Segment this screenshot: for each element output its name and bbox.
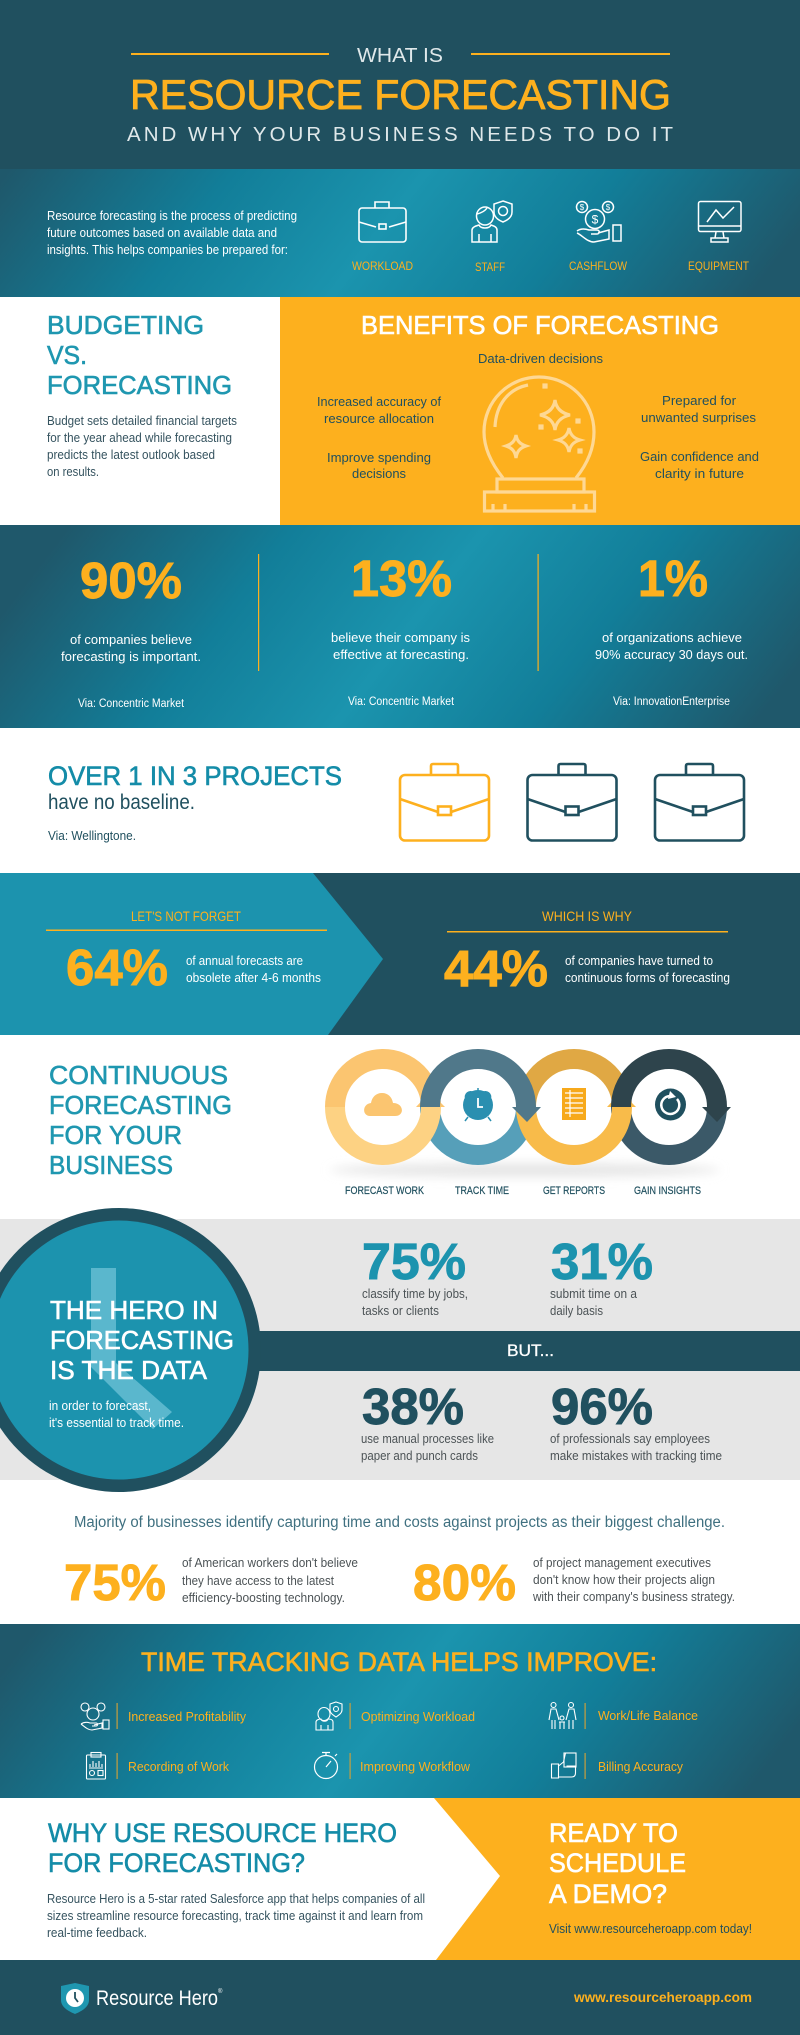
stat: 13%: believe their company is	[331, 630, 470, 645]
stat: 31% submit: daily basis	[550, 1303, 603, 1318]
item: optimizing workload: Optimizing Workload	[361, 1709, 475, 1724]
heading: continuous forecasting: FOR YOUR	[49, 1122, 182, 1150]
stat: 75% classify: tasks or clients	[362, 1303, 439, 1318]
stat: 96% mistakes: make mistakes with tracking time	[550, 1448, 722, 1463]
panel: benefits of forecasting	[280, 297, 800, 525]
website: www.resourceheroapp.com	[573, 1989, 752, 2005]
stat: 90%	[61, 552, 201, 710]
icon: cashflow	[576, 202, 621, 242]
text: 64% description: obsolete after 4-6 months	[186, 970, 321, 985]
panel: intro band	[0, 169, 800, 297]
label: equipment: EQUIPMENT	[688, 259, 750, 273]
heading: the hero in forecasting: THE HERO IN	[50, 1297, 218, 1325]
icon: workload briefcase	[359, 202, 406, 242]
benefit: confidence: Gain confidence and	[640, 449, 759, 464]
heading: budgeting vs forecasting	[47, 312, 232, 400]
label: which is why: WHICH IS WHY	[542, 908, 633, 924]
icon: cashflow: $	[580, 203, 585, 212]
intro text: Resource forecasting is the process of predicting	[47, 208, 297, 223]
stat: 75% classify: classify time by jobs,	[362, 1286, 468, 1301]
brand name: Resource Hero	[96, 1987, 218, 2010]
heading: continuous forecasting: CONTINUOUS	[49, 1062, 228, 1090]
intro text: future outcomes based on available data and	[47, 225, 277, 240]
panel: time tracking data	[0, 1624, 800, 1798]
stat: 13%: 13%	[351, 550, 452, 607]
text: track time note: in order to forecast,	[49, 1398, 151, 1413]
panel: over 1 in 3 projects	[0, 728, 800, 873]
stat: 80% executives: with their company's business strategy.	[532, 1589, 735, 1604]
text: budget description: Budget sets detailed financial targets	[47, 413, 237, 428]
stat: 1%: 90% accuracy 30 days out.	[595, 647, 748, 662]
icon: staff	[472, 201, 512, 242]
stat: 38% manual: paper and punch cards	[361, 1448, 478, 1463]
source: Via: Wellingtone.	[48, 828, 136, 843]
text: track time note: it's essential to track time.	[49, 1415, 184, 1430]
label: get reports: GET REPORTS	[543, 1185, 605, 1197]
benefit: spending: Improve spending	[327, 450, 431, 465]
benefit: spending	[327, 450, 431, 481]
heading: ready to schedule a demo: SCHEDULE	[549, 1848, 686, 1878]
item: increased profitability	[81, 1703, 246, 1730]
stat: 13%: effective at forecasting.	[333, 647, 469, 662]
subtitle: AND WHY YOUR BUSINESS NEEDS TO DO IT	[127, 123, 673, 146]
heading: budgeting vs forecasting: BUDGETING	[47, 312, 204, 340]
label: but: BUT...	[507, 1341, 554, 1360]
icon: equipment	[698, 202, 741, 242]
heading: continuous forecasting: BUSINESS	[49, 1152, 173, 1180]
panel: stats band	[0, 525, 800, 728]
heading: ready to schedule a demo: READY TO	[549, 1818, 678, 1848]
stat: 75% american workers	[64, 1554, 358, 1611]
stat: 31% submit: submit time on a	[550, 1286, 638, 1301]
stat: 1%	[595, 550, 748, 708]
label: forecast work: FORECAST WORK	[345, 1185, 425, 1197]
icon: insights	[655, 1088, 686, 1120]
benefit: accuracy: resource allocation	[324, 411, 434, 426]
text: resource hero description: Resource Hero is a 5-star rated Salesforce app that helps companies of all	[47, 1891, 425, 1906]
stat: 31% submit	[550, 1233, 653, 1318]
stat: 80% executives: of project management executives	[533, 1555, 711, 1570]
item: optimizing workload	[316, 1702, 475, 1730]
but bar	[255, 1331, 800, 1371]
text: resource hero description: sizes streamline resource forecasting, track time against it and learn from	[47, 1908, 423, 1923]
text: resource hero description	[47, 1891, 425, 1940]
stat: 44%: 44%	[444, 940, 548, 997]
arrow panel: why use resource hero	[0, 1798, 500, 1960]
title: what is: WHAT IS	[357, 45, 443, 67]
heading: budgeting vs forecasting: FORECASTING	[47, 372, 232, 400]
text: track time note	[49, 1398, 184, 1430]
panel: budgeting vs forecasting	[0, 297, 280, 525]
benefit: confidence: clarity in future	[655, 466, 744, 481]
heading: majority statement: Majority of businesses identify capturing time and costs against projects as their biggest challenge.	[74, 1514, 725, 1531]
stat: 90%: Via: Concentric Market	[78, 698, 185, 710]
panel: the hero in forecasting	[0, 1208, 800, 1492]
stat: 80% executives	[413, 1554, 735, 1611]
stat: 90%: 90%	[80, 552, 182, 609]
icon: dark briefcase 1	[528, 764, 616, 840]
stat: 13%: Via: Concentric Market	[348, 696, 455, 708]
panel: continuous forecasting	[0, 1035, 800, 1219]
benefit: confidence	[640, 449, 759, 481]
registered mark: ®	[218, 1988, 223, 1995]
heading: why use resource hero	[48, 1818, 397, 1878]
stat: 96% mistakes: 96%	[551, 1378, 653, 1435]
intro text	[47, 208, 297, 257]
stat: 80% executives: 80%	[413, 1554, 516, 1611]
panel: let's not forget / which is why	[0, 873, 800, 1035]
stat: 75% american workers: they have access to the latest	[182, 1573, 334, 1588]
text: 64% description	[186, 953, 321, 985]
stat: 31% submit: 31%	[551, 1233, 653, 1290]
text: resource hero description: real-time feedback.	[47, 1925, 147, 1940]
heading: benefits: BENEFITS OF FORECASTING	[361, 312, 719, 340]
label: cashflow: CASHFLOW	[569, 259, 628, 273]
title: resource forecasting: RESOURCE FORECASTING	[130, 71, 671, 118]
benefit: spending: decisions	[352, 466, 406, 481]
arrow panel	[0, 873, 383, 1035]
heading: the hero in forecasting: FORECASTING	[50, 1327, 234, 1355]
heading: continuous forecasting: FORECASTING	[49, 1092, 232, 1120]
heading: time tracking: TIME TRACKING DATA HELPS IMPROVE:	[141, 1647, 657, 1677]
icon: dark briefcase 2	[655, 764, 744, 840]
chart: cycle rings	[330, 1059, 731, 1177]
panel: title header	[0, 0, 800, 169]
label: gain insights: GAIN INSIGHTS	[634, 1185, 701, 1197]
stat: 75% classify	[362, 1233, 468, 1318]
text: budget description: on results.	[47, 464, 99, 479]
stat: 38% manual	[361, 1378, 494, 1463]
item: billing accuracy	[552, 1753, 683, 1778]
panel: biggest challenge	[0, 1492, 800, 1624]
stat: 38% manual: use manual processes like	[361, 1431, 494, 1446]
icon: cashflow: $	[606, 203, 611, 212]
circle badge	[0, 1208, 261, 1492]
item: recording of work	[86, 1752, 229, 1779]
heading: budgeting vs forecasting: VS.	[47, 342, 87, 370]
item: billing accuracy: Billing Accuracy	[598, 1759, 683, 1774]
stat: 38% manual: 38%	[362, 1378, 464, 1435]
benefit: accuracy	[317, 394, 441, 426]
item: improving workflow: Improving Workflow	[360, 1759, 471, 1774]
stat: 75% american workers: 75%	[64, 1554, 166, 1611]
heading: ready to schedule a demo	[549, 1818, 686, 1909]
stat: 90%: forecasting is important.	[61, 649, 201, 664]
stat: 1%: of organizations achieve	[602, 630, 742, 645]
heading: continuous forecasting	[49, 1062, 232, 1180]
item: improving workflow	[314, 1752, 471, 1778]
label: track time: TRACK TIME	[455, 1185, 509, 1197]
subheading: have no baseline.	[48, 791, 195, 814]
stat: 13%	[331, 550, 470, 708]
heading: the hero in forecasting	[50, 1297, 234, 1385]
icon: gold briefcase	[400, 764, 489, 840]
text: visit site: Visit www.resourceheroapp.com today!	[549, 1921, 752, 1936]
stat: 80% executives: don't know how their projects align	[533, 1572, 715, 1587]
icon: alarm clock	[463, 1088, 493, 1121]
item: recording of work: Recording of Work	[128, 1759, 229, 1774]
icon: cloud	[364, 1093, 402, 1116]
stat: 96% mistakes: of professionals say employees	[550, 1431, 710, 1446]
stat: 96% mistakes	[550, 1378, 722, 1463]
text: 64% description: of annual forecasts are	[186, 953, 303, 968]
stat: 1%: 1%	[638, 550, 708, 607]
stat: 90%: of companies believe	[70, 632, 192, 647]
benefit: surprises: Prepared for	[662, 393, 737, 408]
heading: why use resource hero: WHY USE RESOURCE HERO	[48, 1818, 397, 1848]
text: 44% description: of companies have turned to	[565, 953, 713, 968]
item: increased profitability: Increased Profitability	[128, 1709, 246, 1724]
stat: 75% american workers: efficiency-boosting technology.	[182, 1590, 345, 1605]
heading: ready to schedule a demo: A DEMO?	[549, 1879, 667, 1909]
stat: 64%: 64%	[66, 939, 168, 996]
text: budget description	[47, 413, 237, 479]
stat: 1%: Via: InnovationEnterprise	[613, 696, 730, 708]
icon: cashflow: $	[592, 212, 599, 226]
icon: report document	[562, 1088, 586, 1120]
text: 44% description	[565, 953, 730, 985]
item: work/life balance: Work/Life Balance	[598, 1708, 698, 1723]
text: budget description: predicts the latest outlook based	[47, 447, 215, 462]
label: let's not forget: LET'S NOT FORGET	[131, 908, 241, 924]
label: staff: STAFF	[475, 260, 505, 274]
intro text: insights. This helps companies be prepared for:	[47, 242, 288, 257]
text: 44% description: continuous forms of forecasting	[565, 970, 730, 985]
benefit: surprises: unwanted surprises	[641, 410, 757, 425]
heading: why use resource hero: FOR FORECASTING?	[48, 1848, 305, 1878]
stat: 75% american workers: of American workers don't believe	[182, 1555, 358, 1570]
benefit: surprises	[641, 393, 757, 425]
panel: ready to schedule	[0, 1798, 800, 1960]
benefit: accuracy: Increased accuracy of	[317, 394, 441, 409]
item: work/life balance	[549, 1702, 698, 1729]
logo: shield	[61, 1983, 89, 2014]
benefit: data-driven: Data-driven decisions	[478, 351, 603, 366]
panel: footer	[0, 1960, 800, 2035]
label: workload: WORKLOAD	[352, 259, 413, 273]
text: budget description: for the year ahead while forecasting	[47, 430, 232, 445]
heading: over 1 in 3 projects: OVER 1 IN 3 PROJECTS	[48, 761, 342, 791]
stat: 75% classify: 75%	[362, 1233, 466, 1290]
icon: crystal ball	[484, 377, 594, 511]
heading: the hero in forecasting: IS THE DATA	[50, 1357, 207, 1385]
